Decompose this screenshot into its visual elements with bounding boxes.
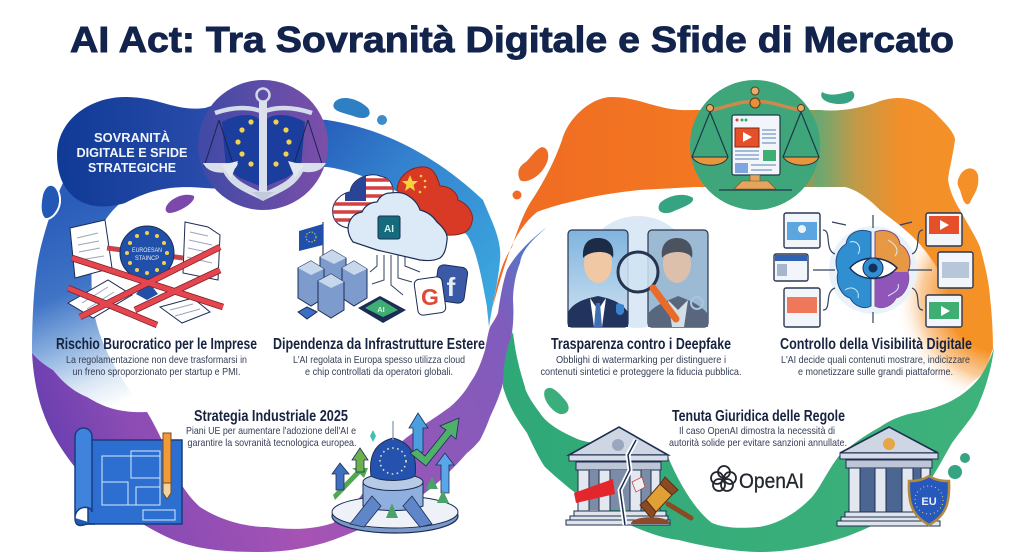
text block: rischio burocratico: un freno sproporzionato per startup e PMI. bbox=[72, 366, 240, 378]
text block: dipendenza infrastrutture: L'AI regolata in Europa spesso utilizza cloud bbox=[293, 354, 465, 366]
badge: sovranità digitale e sfide strategiche: STRATEGICHE bbox=[88, 161, 176, 175]
main cloud bbox=[348, 193, 447, 261]
icon: cracked courthouse, red stamp and gavel bbox=[566, 427, 691, 525]
text block: tenuta giuridica bbox=[669, 408, 847, 449]
icon: EU dome on platform with growth arrows bbox=[332, 413, 459, 533]
icon: foreign cloud, servers and platforms: f bbox=[447, 272, 456, 302]
text block: rischio burocratico: Rischio Burocratico per le Imprese bbox=[56, 336, 257, 353]
text block: strategia industriale: Piani UE per aumentare l'adozione dell'AI e bbox=[186, 425, 356, 437]
text block: dipendenza infrastrutture bbox=[273, 336, 485, 378]
connection arrows bbox=[370, 255, 420, 295]
text block: strategia industriale: garantire la sovranità tecnologica europea. bbox=[188, 437, 356, 449]
small chip bbox=[298, 307, 317, 319]
icon: red tape over documents and EU seal: STAINCP bbox=[135, 255, 159, 262]
text block: rischio burocratico bbox=[56, 336, 257, 378]
icon: scales weighing a web page bbox=[690, 80, 820, 210]
decorative blobs: blue and purple bbox=[41, 98, 387, 219]
facebook tile bbox=[434, 264, 468, 304]
green AI chip bbox=[358, 296, 406, 323]
icon: foreign cloud, servers and platforms bbox=[298, 167, 472, 323]
title: AI Act: Tra Sovranità Digitale e Sfide di Mercato bbox=[70, 19, 954, 60]
decorative blobs: orange and green bbox=[512, 91, 978, 479]
logo: OpenAI: OpenAI bbox=[739, 470, 804, 493]
text block: controllo visibilità: Controllo della Visibilità Digitale bbox=[780, 336, 972, 353]
text block: tenuta giuridica: autorità solide per evitare sanzioni annullate. bbox=[669, 437, 847, 449]
icon: foreign cloud, servers and platforms: AI bbox=[377, 305, 385, 314]
text block: tenuta giuridica: Tenuta Giuridica delle Regole bbox=[672, 408, 845, 425]
EU flag bbox=[299, 222, 323, 258]
badge: sovranità digitale e sfide strategiche: DIGITALE E SFIDE bbox=[76, 146, 188, 160]
text block: strategia industriale bbox=[186, 408, 356, 449]
text block: trasparenza deepfake: Obblighi di watermarking per distinguere i bbox=[556, 354, 726, 366]
icon: deepfake portraits and magnifier bbox=[568, 216, 708, 328]
ribbon: blue and purple left loop bbox=[32, 118, 547, 552]
AI chip bbox=[378, 216, 400, 239]
text block: controllo visibilità: e monetizzare sulle grandi piattaforme. bbox=[798, 366, 953, 378]
text block: rischio burocratico: La regolamentazione non deve trasformarsi in bbox=[66, 354, 247, 366]
text block: dipendenza infrastrutture: e chip controllati da operatori globali. bbox=[305, 366, 453, 378]
text block: dipendenza infrastrutture: Dipendenza da Infrastrutture Estere bbox=[273, 336, 485, 353]
ribbon: orange loop bbox=[493, 97, 993, 427]
text block: trasparenza deepfake: contenuti sintetici e proteggere la fiducia pubblica. bbox=[540, 366, 742, 378]
text block: controllo visibilità: L'AI decide quali contenuti mostrare, indicizzare bbox=[781, 354, 970, 366]
text block: controllo visibilità bbox=[780, 336, 972, 378]
flags in clouds bbox=[330, 167, 472, 235]
text block: trasparenza deepfake bbox=[540, 336, 742, 378]
icon: blueprint and pencil bbox=[75, 428, 182, 526]
icon: solid courthouse with EU shield bbox=[837, 427, 949, 526]
icon: red tape over documents and EU seal: EUROESAN bbox=[132, 247, 162, 254]
ribbon: green loop bbox=[503, 332, 994, 552]
panel: sovranità digitale bbox=[32, 80, 547, 552]
icon: foreign cloud, servers and platforms: G bbox=[421, 284, 439, 310]
servers bbox=[298, 250, 367, 318]
text block: tenuta giuridica: Il caso OpenAI dimostra la necessità di bbox=[679, 425, 835, 437]
badge: sovranità digitale e sfide strategiche: SOVRANITÀ bbox=[94, 130, 170, 145]
text block: strategia industriale: Strategia Industriale 2025 bbox=[194, 408, 348, 425]
google tile bbox=[414, 276, 446, 316]
badge: sovranità digitale e sfide strategiche bbox=[57, 97, 240, 206]
icon: anchor with EU flag and scales bbox=[198, 80, 328, 210]
icon: solid courthouse with EU shield: EU bbox=[921, 496, 937, 508]
icon: foreign cloud, servers and platforms: AI bbox=[384, 224, 394, 235]
panel: visibilità e regole bbox=[493, 80, 994, 552]
icon: brain with eye and content cards bbox=[774, 213, 973, 327]
logo: OpenAI bbox=[711, 466, 804, 493]
icon: red tape over documents and EU seal bbox=[68, 220, 223, 325]
text block: trasparenza deepfake: Trasparenza contro i Deepfake bbox=[551, 336, 731, 353]
